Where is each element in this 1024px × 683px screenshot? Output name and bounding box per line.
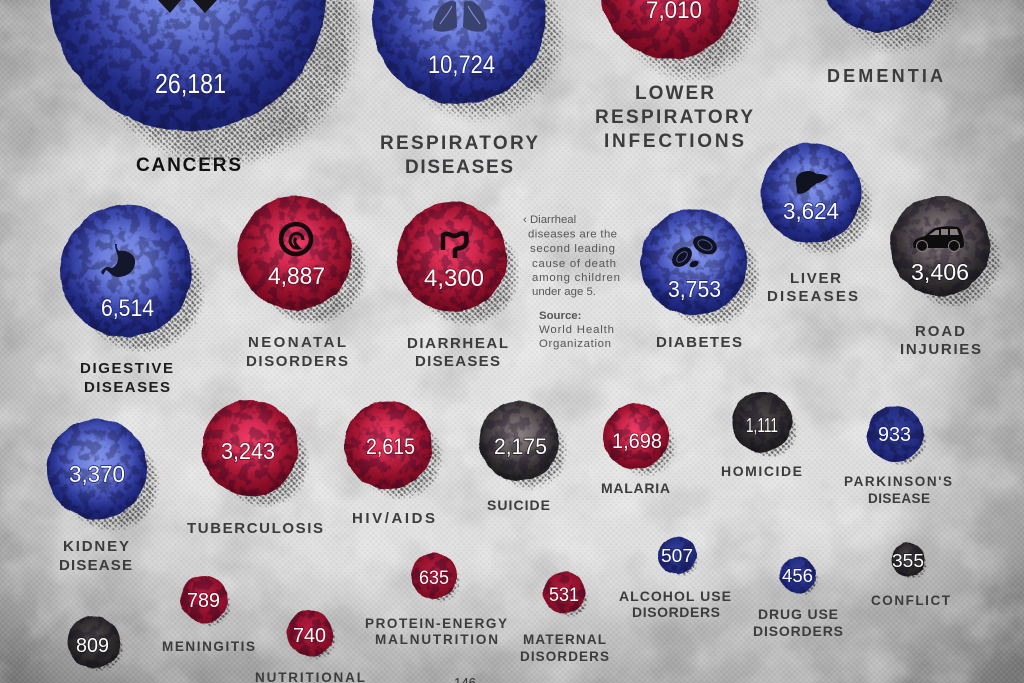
bubble: kidney disease: [47, 419, 147, 574]
label: alcohol use disorders: DISORDERS: [632, 604, 720, 620]
bubble: diarrheal diseases: [397, 202, 508, 370]
note: diarrheal diseases: Source:: [539, 310, 581, 322]
label: respiratory diseases: DISEASES: [405, 157, 513, 178]
bubble: respiratory diseases: [372, 0, 546, 178]
value: 809: 809: [76, 635, 109, 657]
label: diabetes: DIABETES: [656, 334, 742, 351]
note: diarrheal diseases: cause of death: [532, 258, 616, 270]
label: respiratory diseases: RESPIRATORY: [380, 133, 538, 154]
icon: liver: [796, 171, 828, 194]
label: diarrheal diseases: DISEASES: [415, 353, 500, 370]
bubble: dementia: [819, 0, 943, 86]
note: diarrheal diseases: under age 5.: [532, 286, 596, 298]
bubble: cancers: [50, 0, 326, 176]
label: neonatal disorders: NEONATAL: [248, 334, 346, 351]
label: alcohol use disorders: ALCOHOL USE: [619, 588, 731, 604]
label: protein-energy malnutrition: PROTEIN-ENERGY: [365, 616, 507, 631]
bubble: 809: [68, 616, 120, 668]
value: homicide: 1,111: [746, 415, 778, 437]
value: hiv/aids: 2,615: [366, 434, 415, 459]
bubble: parkinson's disease: [844, 406, 952, 506]
bubble: hiv/aids: [344, 401, 435, 527]
icon: blood cells: [668, 232, 720, 271]
value: suicide: 2,175: [494, 434, 547, 459]
note: diarrheal diseases: Organization: [539, 338, 611, 350]
label: tuberculosis: TUBERCULOSIS: [187, 520, 323, 537]
label: maternal disorders: MATERNAL: [523, 632, 606, 647]
value: parkinson's disease: 933: [878, 424, 911, 446]
label: kidney disease: KIDNEY: [63, 538, 129, 555]
label: road injuries: INJURIES: [900, 341, 981, 358]
label: drug use disorders: DISORDERS: [753, 623, 843, 639]
value: drug use disorders: 456: [782, 566, 813, 586]
value: digestive diseases: 6,514: [101, 295, 154, 322]
bubble: tuberculosis: [187, 400, 323, 537]
value: neonatal disorders: 4,887: [268, 263, 325, 290]
label: cancers: CANCERS: [136, 155, 241, 176]
value: maternal disorders: 531: [549, 585, 579, 606]
bubble: suicide: [479, 401, 559, 513]
label: maternal disorders: DISORDERS: [520, 649, 609, 664]
label: malaria: MALARIA: [601, 480, 670, 496]
value: alcohol use disorders: 507: [661, 546, 693, 566]
value: malaria: 1,698: [612, 430, 662, 453]
bubble: drug use disorders: [753, 557, 843, 639]
value: nutritional deficiencies: 740: [293, 625, 326, 647]
icon: cancer ribbon: [158, 0, 217, 13]
icon: car: [913, 226, 964, 252]
bubble: diabetes: [641, 209, 747, 351]
label: lower respiratory infections: RESPIRATORY: [595, 107, 753, 128]
value: tuberculosis: 3,243: [221, 438, 275, 464]
icon: embryo: [281, 224, 311, 254]
label: conflict: CONFLICT: [871, 593, 951, 608]
value: road injuries: 3,406: [911, 259, 969, 285]
bubble: malaria: [601, 403, 670, 496]
label: digestive diseases: DISEASES: [84, 379, 170, 396]
note: diarrheal diseases: among children: [532, 272, 620, 284]
bubble: conflict: [871, 543, 951, 608]
label: road injuries: ROAD: [915, 323, 965, 340]
icon: lungs: [433, 1, 487, 32]
label: parkinson's disease: DISEASE: [868, 491, 930, 506]
label: lower respiratory infections: INFECTIONS: [604, 131, 744, 152]
bubble: nutritional deficiencies: [255, 610, 365, 683]
value: diarrheal diseases: 4,300: [424, 265, 484, 292]
value: conflict: 355: [892, 551, 924, 571]
label: dementia: DEMENTIA: [827, 66, 943, 86]
label: lower respiratory infections: LOWER: [635, 83, 714, 104]
value: kidney disease: 3,370: [69, 461, 125, 487]
note: diarrheal diseases: World Health: [539, 324, 614, 336]
label: neonatal disorders: DISORDERS: [246, 353, 348, 370]
bubble: maternal disorders: [520, 572, 609, 664]
note: diarrheal diseases: diseases are the: [528, 228, 617, 240]
label: drug use disorders: DRUG USE: [758, 606, 838, 622]
bubble: lower respiratory infections: [595, 0, 753, 152]
label: hiv/aids: HIV/AIDS: [352, 510, 435, 527]
value: meningitis: 789: [187, 590, 220, 612]
bubble: homicide: [721, 392, 802, 479]
value: diabetes: 3,753: [668, 276, 721, 302]
icon: intestine: [443, 233, 467, 258]
bubble: alcohol use disorders: [619, 536, 731, 620]
icon: stomach: [101, 244, 135, 277]
note: diarrheal diseases: ‹ Diarrheal: [523, 214, 576, 226]
bubble: liver diseases: [761, 143, 861, 305]
label: kidney disease: DISEASE: [59, 557, 132, 574]
note: diarrheal diseases: [523, 214, 620, 350]
bubble: neonatal disorders: [238, 196, 352, 370]
label: protein-energy malnutrition: MALNUTRITION: [375, 632, 498, 647]
value: cancers: 26,181: [155, 68, 226, 99]
label: homicide: HOMICIDE: [721, 463, 802, 479]
label: diarrheal diseases: DIARRHEAL: [407, 335, 508, 352]
label: parkinson's disease: PARKINSON'S: [844, 474, 952, 489]
note: diarrheal diseases: second leading: [530, 243, 615, 255]
label: suicide: SUICIDE: [487, 497, 550, 513]
bubble: road injuries: [890, 196, 990, 358]
value: protein-energy malnutrition: 635: [419, 568, 449, 589]
label: digestive diseases: DIGESTIVE: [80, 360, 173, 377]
label: liver diseases: LIVER: [790, 270, 841, 287]
value: liver diseases: 3,624: [783, 198, 839, 224]
bubble: protein-energy malnutrition: [365, 553, 507, 647]
label: liver diseases: DISEASES: [767, 288, 858, 305]
bubble: digestive diseases: [60, 205, 192, 396]
value: respiratory diseases: 10,724: [428, 51, 495, 79]
label: meningitis: MENINGITIS: [162, 639, 255, 654]
bubble: meningitis: [162, 575, 255, 654]
